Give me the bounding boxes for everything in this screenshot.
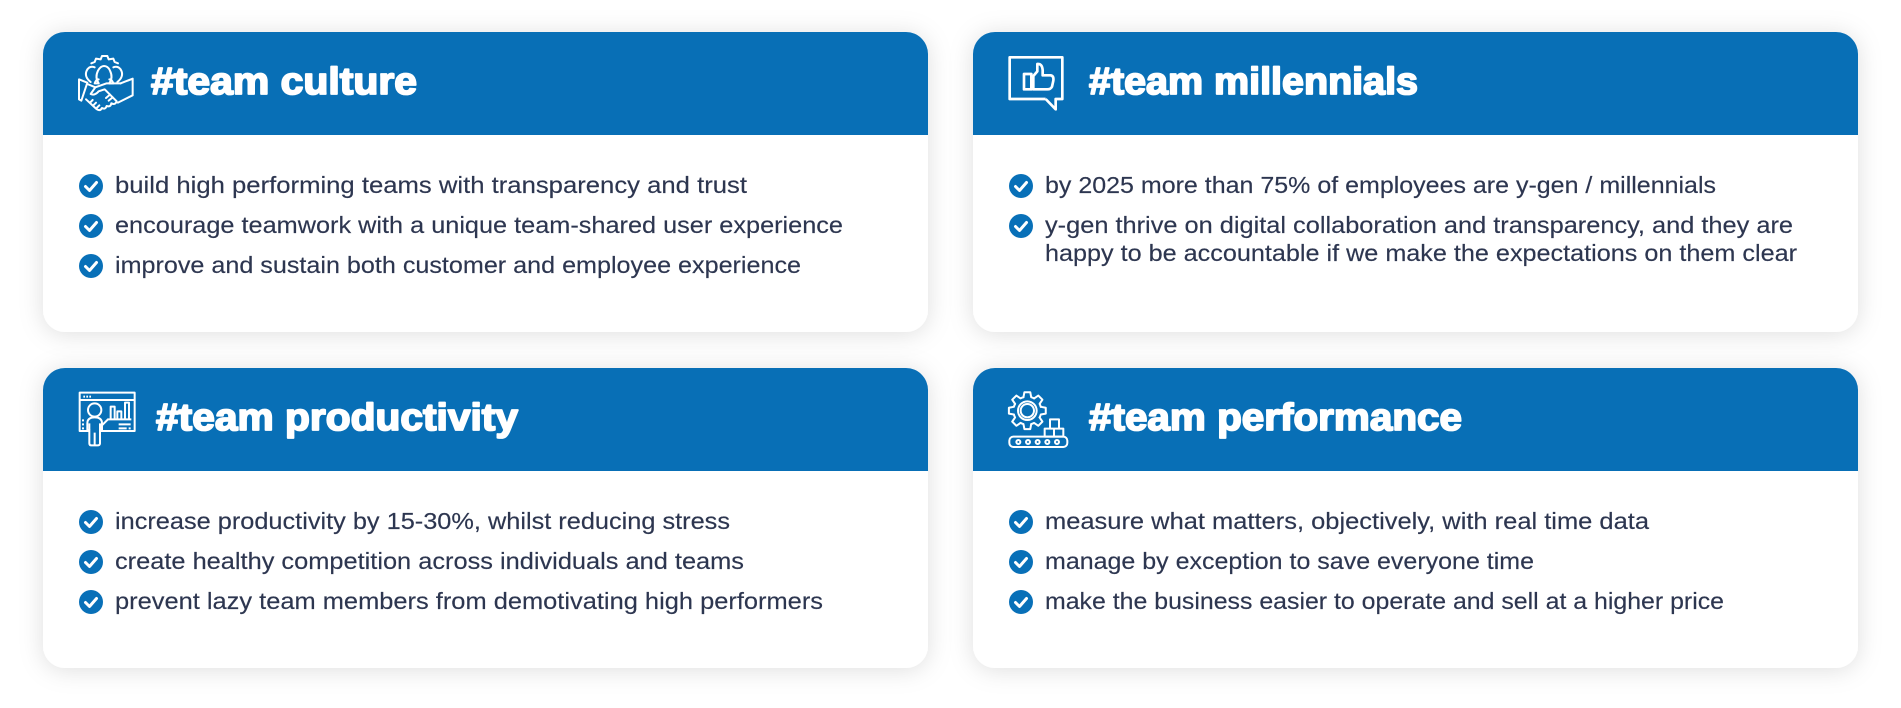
card background <box>43 368 928 668</box>
panel: team millennials <box>973 32 1858 332</box>
bullet 2 <box>1009 212 1797 266</box>
bullet 2: happy to be accountable if we make the expectations on them clear <box>1045 240 1797 266</box>
header band <box>973 368 1858 471</box>
card background <box>973 368 1858 668</box>
heading: #team productivity <box>156 397 518 439</box>
bullet 1: measure what matters, objectively, with real time data <box>1045 508 1649 534</box>
bullet 1: by 2025 more than 75% of employees are y-gen / millennials <box>1045 172 1716 198</box>
icon: presenter at dashboard <box>80 393 135 445</box>
bullet 2: y-gen thrive on digital collaboration and transparency, and they are <box>1045 212 1793 238</box>
icon: thumbs up in speech bubble <box>1010 57 1062 109</box>
bullet 3: improve and sustain both customer and employee experience <box>115 252 801 278</box>
heading: #team performance <box>1089 397 1462 439</box>
bullet 2: create healthy competition across individuals and teams <box>115 548 744 574</box>
panel: team performance <box>973 368 1858 668</box>
header band <box>973 32 1858 135</box>
bullet list <box>1009 172 1797 266</box>
bullet list <box>79 508 823 614</box>
bullet list <box>79 172 843 278</box>
header band <box>43 32 928 135</box>
bullet 1: increase productivity by 15-30%, whilst reducing stress <box>115 508 730 534</box>
heading: #team culture <box>151 61 417 103</box>
panel: team productivity <box>43 368 928 668</box>
card background <box>43 32 928 332</box>
heading: #team millennials <box>1089 61 1418 103</box>
panel: team culture <box>43 32 928 332</box>
bullet 2: encourage teamwork with a unique team-shared user experience <box>115 212 843 238</box>
card background <box>973 32 1858 332</box>
icon: gear and conveyor belt <box>1009 392 1067 447</box>
bullet 3: make the business easier to operate and sell at a higher price <box>1045 588 1724 614</box>
icon: handshake with team and gear <box>79 56 133 110</box>
bullet list <box>1009 508 1724 614</box>
bullet 3: prevent lazy team members from demotivating high performers <box>115 588 823 614</box>
bullet 2: manage by exception to save everyone time <box>1045 548 1534 574</box>
bullet 1: build high performing teams with transparency and trust <box>115 172 748 198</box>
header band <box>43 368 928 471</box>
